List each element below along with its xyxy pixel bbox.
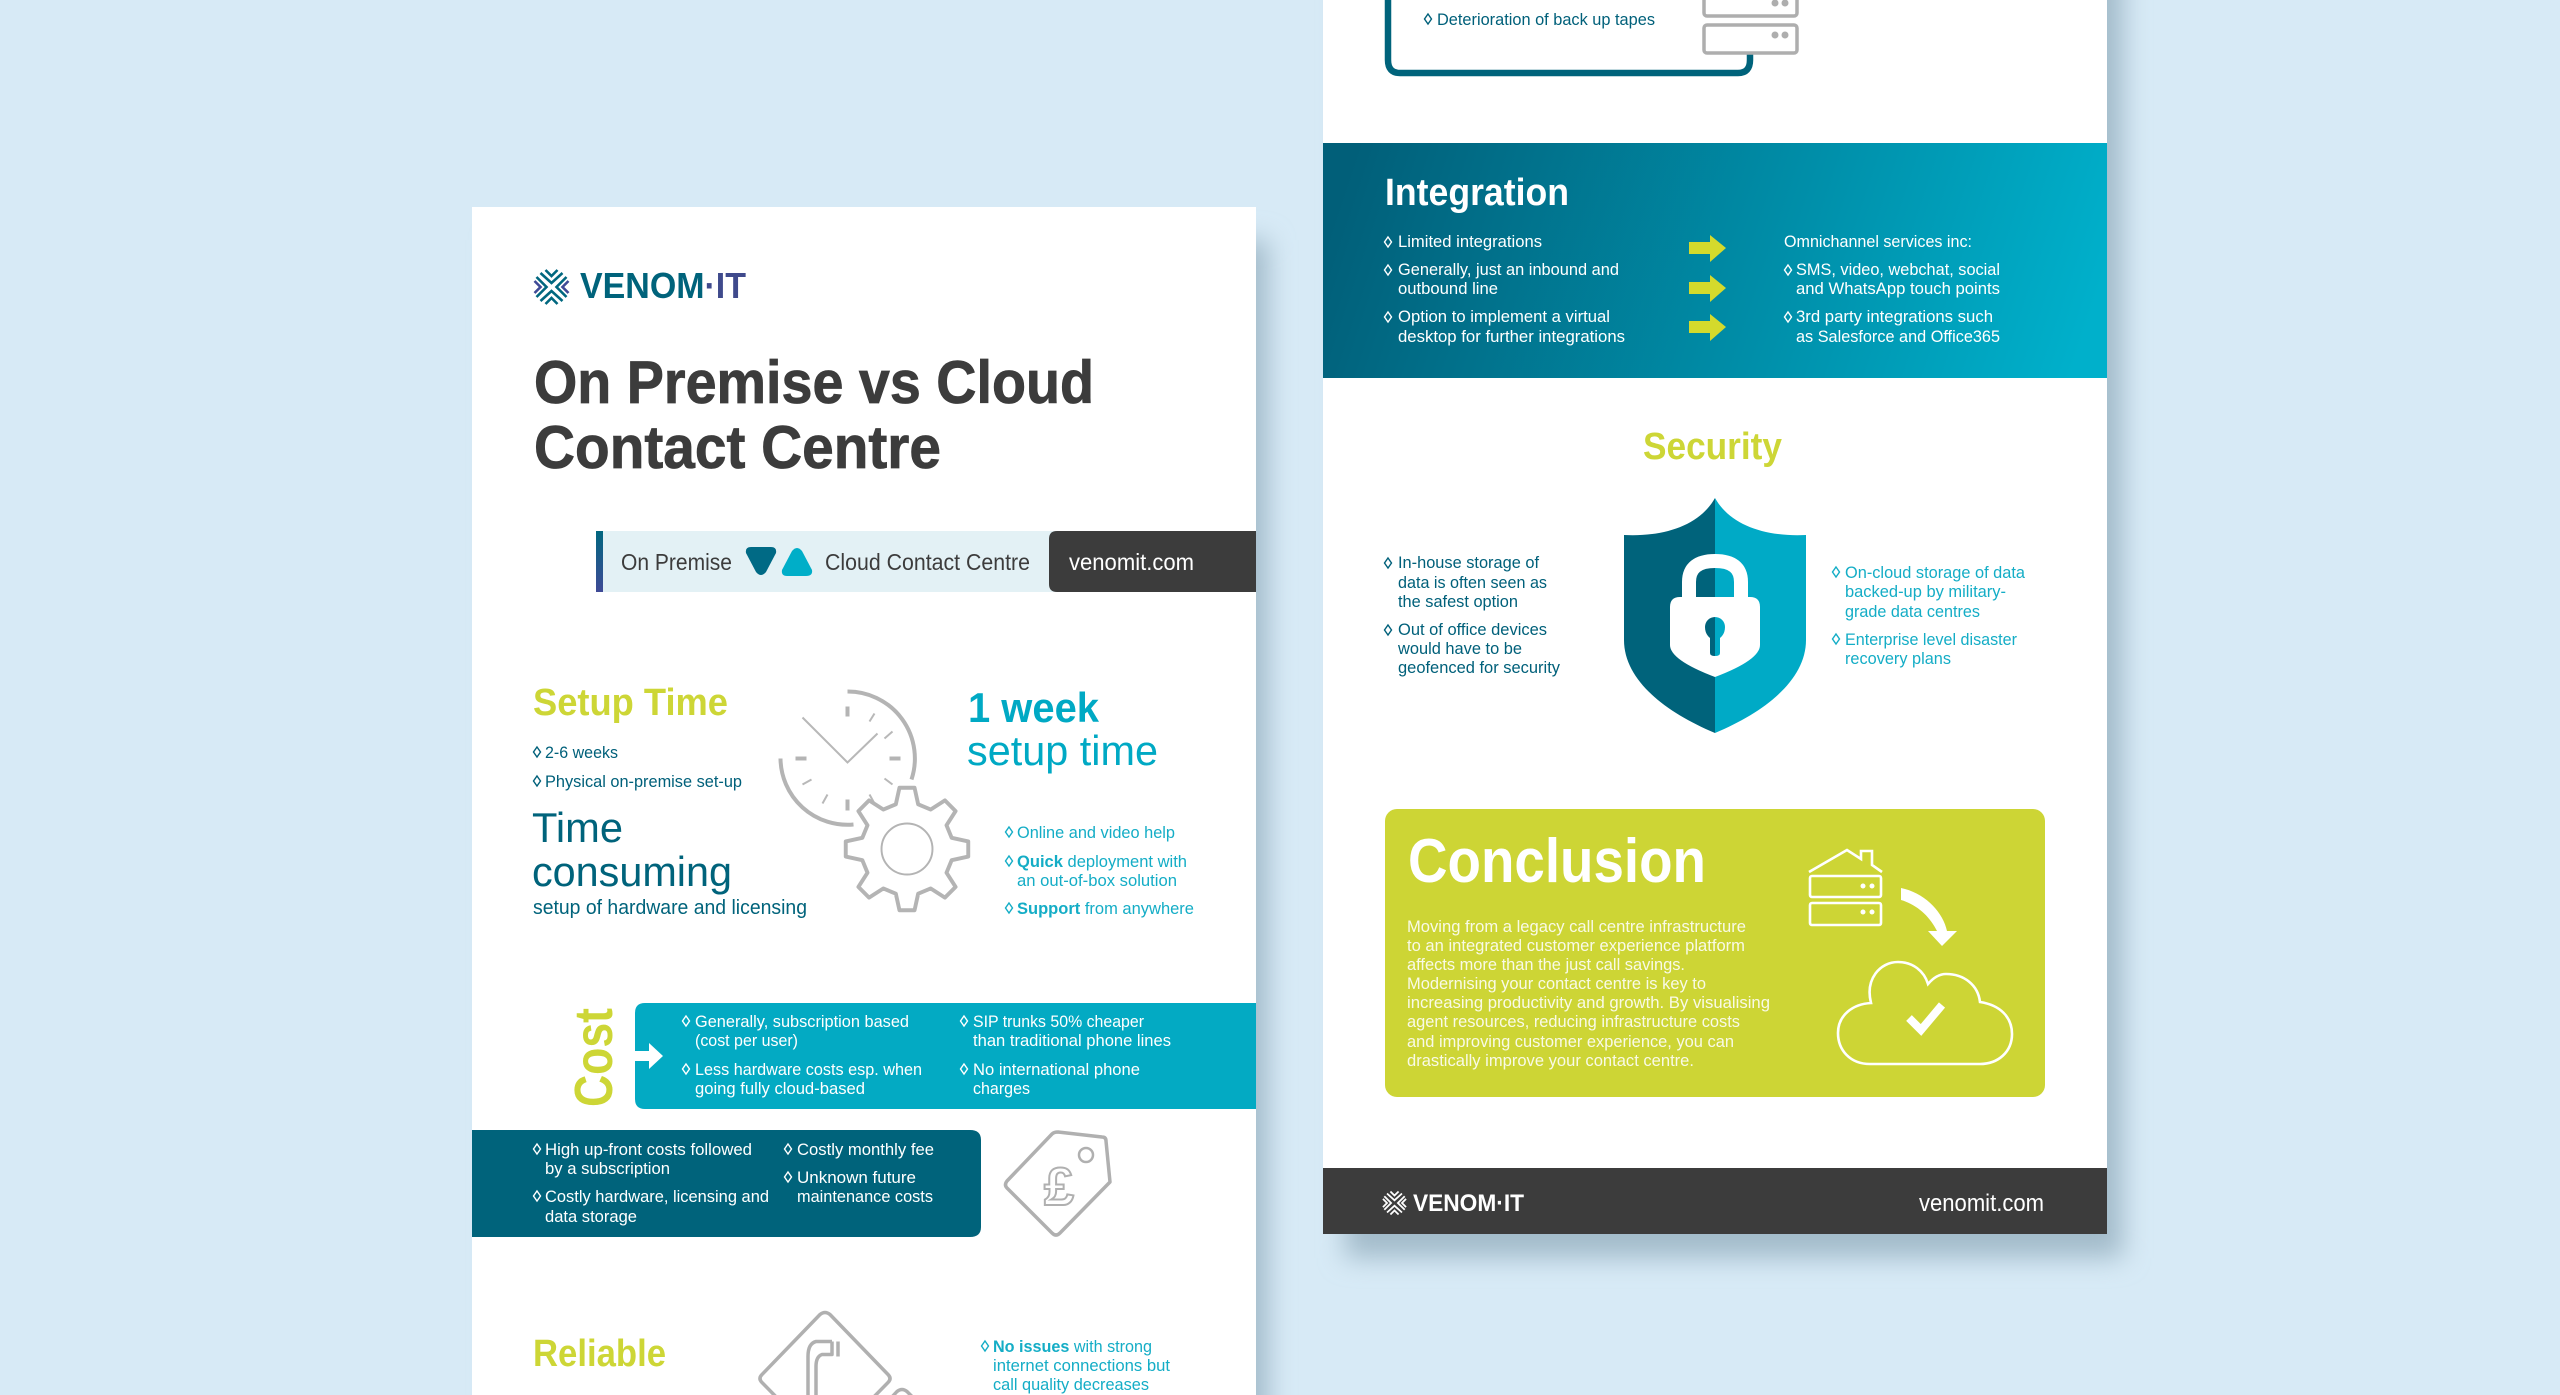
heading: reliable: Reliable (533, 1333, 666, 1375)
conclusion body: to an integrated customer experience platform (1407, 936, 1745, 955)
heading: security: Security (1643, 426, 1782, 468)
section: security (1384, 426, 2026, 733)
section: reliable (533, 1312, 1170, 1395)
panel: cloud cost: SIP trunks 50% cheaper (973, 1012, 1144, 1031)
footer (1323, 1168, 2107, 1234)
panel: conclusion (1385, 809, 2045, 1097)
section: setup time (532, 682, 1194, 919)
conclusion body: increasing productivity and growth. By visualising (1407, 993, 1770, 1012)
panel: cloud cost: No international phone (973, 1060, 1140, 1079)
panel: on premise cost: Costly monthly fee (797, 1140, 934, 1159)
panel: cloud cost: (cost per user) (695, 1031, 798, 1050)
on premise bullets: Physical on-premise set-up (545, 772, 742, 791)
cloud security bullets: backed-up by military- (1845, 582, 2006, 601)
callout: 1 week setup time: setup time (967, 727, 1158, 774)
arrow: curved (1901, 888, 1957, 946)
panel: cloud cost: Less hardware costs esp. when (695, 1060, 922, 1079)
footer url: venomit.com (1919, 1190, 2044, 1217)
callout: time consuming: Time (532, 804, 623, 851)
icon: logo mark (534, 270, 568, 304)
icon: phone (760, 1312, 920, 1395)
cloud bullets: Support from anywhere (1017, 899, 1194, 918)
panel: on premise cost: Costly hardware, licensing and (545, 1187, 769, 1206)
reliable bullets: internet connections but (993, 1356, 1170, 1375)
conclusion body: Moving from a legacy call centre infrastructure (1407, 917, 1746, 936)
cloud integration bullets: 3rd party integrations such (1796, 307, 1993, 326)
reliable bullets (982, 1337, 1170, 1394)
title: On Premise vs Cloud (534, 349, 1094, 416)
legend bar: Cloud Contact Centre (825, 549, 1030, 575)
heading: conclusion: Conclusion (1408, 827, 1706, 896)
icon: shield with padlock (1624, 498, 1806, 733)
icon: price tag (1006, 1132, 1110, 1235)
reliable bullets: No issues with strong (993, 1337, 1152, 1356)
logo: footer: VENOM·IT (1413, 1190, 1524, 1217)
reliable bullets: call quality decreases (993, 1375, 1149, 1394)
outline box (1388, 0, 1750, 73)
panel: cloud cost: charges (973, 1079, 1030, 1098)
cloud bullets: Quick deployment with (1017, 852, 1187, 871)
legend bar: venomit.com (1069, 549, 1194, 575)
on premise security bullets: the safest option (1398, 592, 1518, 611)
icon: house with servers (1809, 850, 1882, 925)
bullet: deterioration: Deterioration of back up tapes (1437, 10, 1655, 29)
panel: on premise cost (472, 1130, 981, 1237)
panel: cloud cost: going fully cloud-based (695, 1079, 865, 1098)
panel: on premise cost: by a subscription (545, 1159, 670, 1178)
callout: 1 week setup time (967, 684, 1158, 774)
on premise bullets (534, 743, 742, 791)
on premise security bullets: Out of office devices (1398, 620, 1547, 639)
icon: cloud triangle (782, 548, 812, 576)
icon: clock (780, 691, 915, 825)
section: integration (1323, 143, 2107, 378)
icon: servers (1704, 0, 1797, 53)
title (534, 349, 1094, 481)
cloud security bullets: On-cloud storage of data (1845, 563, 2026, 582)
on premise security bullets: would have to be (1397, 639, 1522, 658)
on premise security bullets: data is often seen as (1398, 573, 1547, 592)
on premise integration bullets: outbound line (1398, 279, 1498, 298)
cloud security bullets: Enterprise level disaster (1845, 630, 2017, 649)
callout: time consuming: consuming (532, 848, 732, 895)
cloud integration bullets: and WhatsApp touch points (1796, 279, 2000, 298)
cloud integration bullets (1784, 232, 2000, 346)
callout: time consuming: setup of hardware and licensing (533, 897, 807, 919)
conclusion body: affects more than the just call savings. (1407, 955, 1685, 974)
panel: left poster page (472, 207, 1256, 1395)
arrows (1689, 235, 1726, 341)
cloud integration bullets: SMS, video, webchat, social (1796, 260, 2000, 279)
panel: cloud cost (635, 1003, 1256, 1109)
on premise security bullets: In-house storage of (1398, 553, 1539, 572)
legend bar: On Premise (621, 549, 732, 575)
conclusion body: drastically improve your contact centre. (1407, 1051, 1694, 1070)
callout: time consuming (532, 804, 807, 919)
heading: setup time: Setup Time (533, 682, 728, 724)
panel: right poster page (1323, 0, 2107, 1234)
panel: on premise cost: maintenance costs (797, 1187, 933, 1206)
panel: cloud cost: than traditional phone lines (973, 1031, 1171, 1050)
on premise integration bullets (1384, 232, 1625, 346)
on premise integration bullets: Generally, just an inbound and (1398, 260, 1619, 279)
icon: on premise triangle (746, 547, 776, 575)
icon: price tag: £ (1044, 1157, 1074, 1217)
on premise security bullets (1384, 553, 1560, 677)
cloud integration bullets: Omnichannel services inc: (1784, 232, 1972, 251)
icon: cloud with check (1838, 962, 2012, 1064)
section: storage remainder (1388, 0, 1797, 73)
panel: on premise cost: High up-front costs followed (545, 1140, 752, 1159)
on premise integration bullets: Option to implement a virtual (1398, 307, 1610, 326)
cloud security bullets (1832, 563, 2026, 668)
conclusion body (1407, 917, 1770, 1070)
title: Contact Centre (534, 414, 941, 481)
callout: 1 week setup time: 1 week (968, 684, 1100, 731)
heading: integration: Integration (1385, 172, 1569, 214)
legend bar (596, 531, 1256, 592)
on premise security bullets: geofenced for security (1398, 658, 1560, 677)
conclusion body: and improving customer experience, you can (1407, 1032, 1734, 1051)
on premise integration bullets: Limited integrations (1398, 232, 1542, 251)
on premise integration bullets: desktop for further integrations (1398, 327, 1625, 346)
heading: cost: Cost (564, 1008, 624, 1107)
on premise bullets: 2-6 weeks (545, 743, 618, 762)
panel: on premise cost: Unknown future (797, 1168, 916, 1187)
section: cost (472, 1003, 1256, 1237)
icon: gear (846, 788, 968, 910)
conclusion body: agent resources, reducing infrastructure costs (1407, 1012, 1740, 1031)
cloud bullets (1006, 823, 1194, 918)
cloud bullets: an out-of-box solution (1017, 871, 1177, 890)
arrow (635, 1043, 663, 1069)
conclusion body: Modernising your contact centre is key to (1407, 974, 1706, 993)
panel: cloud cost: Generally, subscription based (695, 1012, 909, 1031)
panel: on premise cost: data storage (545, 1207, 637, 1226)
cloud integration bullets: as Salesforce and Office365 (1796, 327, 2000, 346)
cloud bullets: Online and video help (1017, 823, 1175, 842)
logo: Venom IT: VENOM·IT (580, 265, 746, 306)
cloud security bullets: grade data centres (1845, 602, 1980, 621)
cloud security bullets: recovery plans (1845, 649, 1951, 668)
